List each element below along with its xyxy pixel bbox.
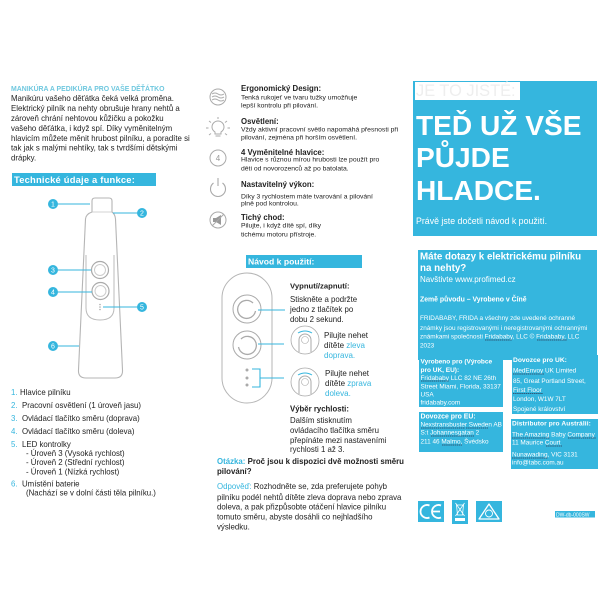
answer: výsledku. (217, 522, 250, 532)
icon: WEEE bin (452, 500, 468, 524)
icon: interchangeable heads (210, 150, 226, 166)
intro text block: zároveň chrání nehtovou kůžičku a pokožku (11, 114, 164, 123)
panel: UK importer: Dovozce pro UK: (513, 357, 567, 364)
panel: EU importer: Nexstransbuster Sweden AB (420, 422, 502, 428)
parts list: Pracovní osvětlení (1 úroveň jasu) (22, 401, 141, 410)
parts list: 3. (11, 414, 18, 423)
feature: lighting: Vždy aktivní pracovní světlo napomáhá přesnosti při (241, 126, 399, 134)
text: left to right: doprava. (324, 351, 355, 360)
text: speed selection: rychlosti 1 až 3. (290, 445, 344, 454)
panel: UK importer: 85, Great Portland Street, (513, 378, 586, 385)
text: left to right (324, 331, 369, 360)
intro text block: drápky. (11, 154, 36, 162)
text: right to left (325, 369, 372, 398)
parts list: 2. (11, 401, 18, 410)
panel: questions and origin: známky jsou registrovanými i neregistrovanými ochrannými (420, 325, 587, 332)
text: on/off: Vypnutí/zapnutí: (290, 282, 350, 290)
heading bar: technické údaje a funkce: Technické údaje a funkce: (14, 174, 135, 185)
device body (78, 198, 123, 378)
heading: manikúra a pedikúra: MANIKÚRA A PEDIKÚRA PRO VAŠE DĚŤÁTKO (11, 84, 165, 93)
icon: silent motor (210, 212, 226, 228)
diagram: device with callouts (48, 198, 147, 378)
diagram: device with callouts: 2 (140, 210, 144, 218)
panel: Australian distributor: 11 Maurice Court (512, 440, 561, 446)
feature: lighting: Osvětlení: (241, 117, 279, 126)
text: on/off: jedno z tlačítek po (289, 305, 354, 314)
answer: doleva, a pak přizpůsobte otáčení hlavice pilníku (217, 502, 386, 512)
panel: questions and origin: Navštivte www.profimed.cz (420, 275, 516, 284)
feature: lighting (241, 117, 399, 142)
feature: interchangeable heads (241, 148, 379, 172)
text: on/off (289, 282, 358, 324)
icon: power (211, 178, 226, 197)
parts list: - Úroveň 3 (Vysoká rychlost) (26, 449, 125, 458)
feature: ergonomic design: lepší kontrolu při pilování. (241, 102, 318, 110)
feature: lighting: pilování, zejména při horším osvětlení. (241, 134, 357, 142)
question: pilování? (217, 467, 252, 476)
question: Otázka: Proč jsou k dispozici dvě možnosti směru (217, 457, 404, 466)
main headline (416, 109, 581, 206)
text: on/off: Stiskněte a podržte (290, 295, 358, 304)
diagram: device with callouts: 3 (51, 268, 55, 274)
panel: EU importer: Dovozce pro EU: (420, 414, 476, 420)
intro text block: Manikúru vašeho děťátka čeká velká proměna. (11, 94, 174, 103)
text: right to left: Pilujte nehet (325, 369, 370, 378)
answer: pilníku podél nehtů dítěte zleva doprava nebo zprava (217, 493, 402, 502)
intro text block: tak jak s malými nehtíky, tak s tvrdšími dětskými (11, 144, 178, 152)
panel: EU importer (419, 412, 503, 452)
panel: questions and origin: známkami společnosti Fridababy, LLC © Fridababy, LLC (420, 332, 580, 340)
parts list: 1. (11, 388, 18, 397)
panel: Australian distributor: info@tabc.com.au (512, 460, 564, 466)
intro text block: hlavicím můžete měnit hrubost pilníku, a poradíte si (11, 134, 190, 143)
text: speed selection: ovládacího tlačítka směru (290, 426, 379, 435)
feature: ergonomic design (241, 84, 357, 110)
feature: ergonomic design: Tenká rukojeť ve tvaru tužky umožňuje (241, 94, 357, 102)
document code: DW-db-000SW (556, 512, 590, 518)
text: left to right: Pilujte nehet (324, 331, 369, 340)
diagram: device with callouts: 1 (51, 202, 55, 208)
parts list: - Úroveň 1 (Nízká rychlost) (26, 468, 120, 476)
panel: UK importer: Spojené království (513, 406, 565, 413)
panel: UK importer: London, W1W 7LT (513, 396, 566, 403)
callouts (53, 204, 142, 346)
panel: UK importer: First Floor (513, 387, 543, 394)
feature: interchangeable heads: 4 Vyměnitelné hlavice: (241, 148, 324, 157)
panel: Australian distributor: The Amazing Baby Company (512, 432, 596, 438)
text: right to left: dítěte zprava (325, 379, 372, 388)
parts list: Ovládací tlačítko směru (doleva) (22, 427, 135, 436)
text: speed selection (290, 404, 387, 454)
panel: manufacturer: Fridababy LLC 82 NE 26th (420, 375, 497, 382)
subline: Právě jste dočetli návod k použití. (416, 216, 547, 226)
panel: manufacturer: fridababy.com (420, 400, 460, 406)
answer: Odpověď: Rozhodněte se, zda preferujete pohyb (217, 482, 388, 491)
text: speed selection: přepínáte mezi nastaveními (290, 436, 387, 445)
intro text block: Elektrický pilník na nehty obrušuje hrany nehtů a (11, 104, 180, 113)
icon: interchangeable heads: 4 (216, 154, 221, 163)
answer (217, 482, 402, 532)
panel: UK importer: MedEnvoy UK Limited (513, 368, 577, 374)
main headline: PŮJDE (416, 140, 510, 173)
diagram: control panel (222, 273, 285, 403)
heading bar: návod k použití: Návod k použití: (248, 256, 315, 266)
panel: closing message (413, 81, 597, 236)
diagram: device with callouts: 6 (51, 344, 55, 350)
parts list: 6. (11, 480, 18, 488)
feature: adjustable power: plně pod kontrolou. (241, 200, 299, 208)
parts list: Hlavice pilníku (20, 388, 71, 397)
panel: questions and origin: na nehty? (420, 263, 466, 274)
icon: finger left to right (291, 326, 319, 354)
panel: Australian distributor: Nunawading, VIC 3131 (512, 452, 578, 458)
parts list: (Nachází se v dolní části těla pilníku.) (26, 488, 156, 498)
panel: EU importer: S:t Johannesgatan 2 (420, 430, 480, 436)
document code (555, 511, 595, 518)
question (217, 457, 404, 476)
features list (206, 84, 399, 238)
main headline: HLADCE. (416, 175, 541, 206)
panel: questions and origin: 2023 (420, 342, 435, 350)
panel: EU importer: 211 46 Malmo, Švédsko (420, 436, 489, 446)
text: right to left: doleva. (325, 389, 351, 398)
panel: manufacturer (419, 355, 503, 407)
feature: interchangeable heads: děti od novorozenců až po batolata. (241, 164, 349, 172)
feature: quiet running (241, 213, 322, 238)
icon: light bulb (206, 117, 230, 136)
text: speed selection: Výběr rychlosti: (290, 404, 349, 414)
feature: quiet running: tichému motoru přístroje. (241, 232, 316, 238)
feature: quiet running: Pilujte, i když dítě spí, díky (241, 222, 322, 230)
parts list: 4. (11, 427, 18, 436)
panel: questions and origin: FRIDABABY, FRIDA a všechny zde uvedené ochranné (420, 315, 576, 322)
parts list (11, 388, 156, 498)
icon: ergonomic waves (210, 89, 226, 105)
diagram: device with callouts: 4 (51, 290, 55, 296)
feature: adjustable power (241, 180, 373, 208)
panel: Australian distributor: Distributor pro Austrálii: (512, 420, 591, 428)
panel: manufacturer: Street Miami, Florida, 33137 (420, 384, 501, 390)
panel: questions and origin (418, 250, 597, 360)
feature: quiet running: Tichý chod: (241, 213, 285, 222)
intro text block: vašeho děťátka, i když spí. Díky vyměnitelným (11, 124, 173, 133)
parts list: 5. (11, 440, 18, 449)
feature: adjustable power: Díky 3 rychlostem máte tvarování a pilování (241, 194, 373, 200)
panel: Australian distributor (511, 419, 598, 469)
diagram: device with callouts: 5 (140, 304, 144, 312)
panel: UK importer (512, 355, 598, 414)
feature: interchangeable heads: Hlavice s různou mírou hrubosti lze použít pro (241, 156, 379, 164)
feature: adjustable power: Nastavitelný výkon: (241, 180, 314, 189)
parts list: Ovládací tlačítko směru (doprava) (22, 414, 140, 423)
panel: manufacturer: Vyrobeno pro (Výrobce (420, 358, 493, 366)
parts list: Umístění baterie (22, 480, 80, 488)
panel: intro (0, 0, 192, 162)
panel: manufacturer: USA (420, 392, 434, 398)
main headline: TEĎ UŽ VŠE (416, 109, 581, 141)
parts list: - Úroveň 2 (Střední rychlost) (26, 458, 125, 467)
icon: CE mark (418, 501, 444, 522)
answer: tomuto směru, abyste dosáhli co nejhladšího (217, 512, 373, 522)
heading bar: návod k použití (246, 255, 362, 268)
panel: questions and origin: Máte dotazy k elektrickému pilníku (420, 252, 581, 262)
panel: questions and origin: Země původu – Vyrobeno v Číně (420, 294, 527, 304)
text: on/off: dobu 2 sekund. (290, 315, 344, 324)
icon: finger right to left (291, 368, 319, 396)
label: je to jiste: JE TO JISTÉ: (416, 81, 516, 100)
text: left to right: dítěte zleva (324, 341, 365, 350)
feature: ergonomic design: Ergonomický Design: (241, 84, 321, 93)
text: speed selection: Dalším stisknutím (290, 416, 352, 425)
icon: RCM mark (476, 501, 502, 522)
panel: manufacturer: pro UK, EU): (420, 367, 459, 374)
parts list: LED kontrolky (22, 440, 71, 449)
